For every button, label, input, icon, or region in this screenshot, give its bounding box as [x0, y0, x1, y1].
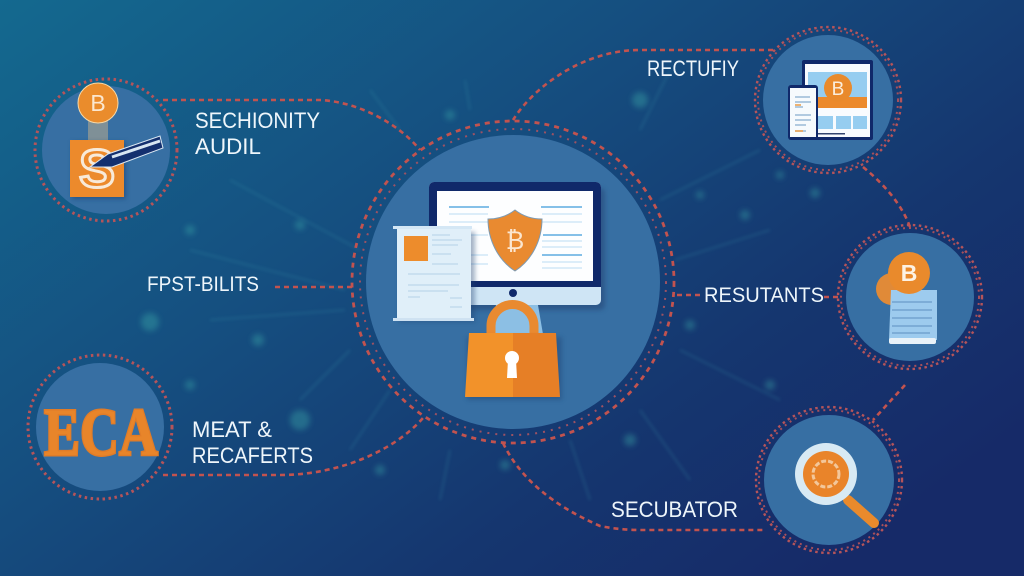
- shield: ₿: [506, 226, 524, 255]
- icon: lock with coin and pen: [70, 83, 163, 199]
- label: SECUBATOR: [611, 497, 738, 522]
- panel: security audit: [35, 79, 320, 221]
- panel: resutants: [704, 225, 982, 369]
- icon: ECA letters: ECA: [44, 394, 158, 470]
- label: RESUTANTS: [704, 284, 824, 307]
- label: RECTUFIY: [647, 56, 739, 81]
- icon: magnifier: [795, 443, 874, 523]
- icon: lock with coin and pen: B: [90, 90, 106, 116]
- icon: lock with coin and pen: S: [79, 139, 115, 199]
- central hub: [352, 121, 674, 443]
- icon: coins and document: B: [901, 260, 917, 286]
- monitor: [429, 182, 605, 340]
- padlock: [465, 304, 562, 400]
- shield: [488, 210, 542, 271]
- label: RECAFERTS: [192, 443, 313, 468]
- label: [195, 108, 320, 159]
- panel: rectufiy: [647, 27, 901, 173]
- label: MEAT &: [192, 417, 272, 442]
- label: [192, 417, 313, 468]
- icon: coins and document: [876, 252, 937, 344]
- panel: secubator: [611, 407, 902, 553]
- icon: tablet and phone: [788, 60, 873, 140]
- label: SECHIONITY: [195, 108, 320, 133]
- panel: meat and recaparts: [28, 355, 313, 499]
- icon: tablet and phone: B: [832, 79, 844, 100]
- connector lines: [163, 50, 910, 530]
- document: [393, 226, 475, 322]
- label: left: FPST-BILITS: [147, 273, 259, 296]
- label: AUDIL: [195, 134, 261, 159]
